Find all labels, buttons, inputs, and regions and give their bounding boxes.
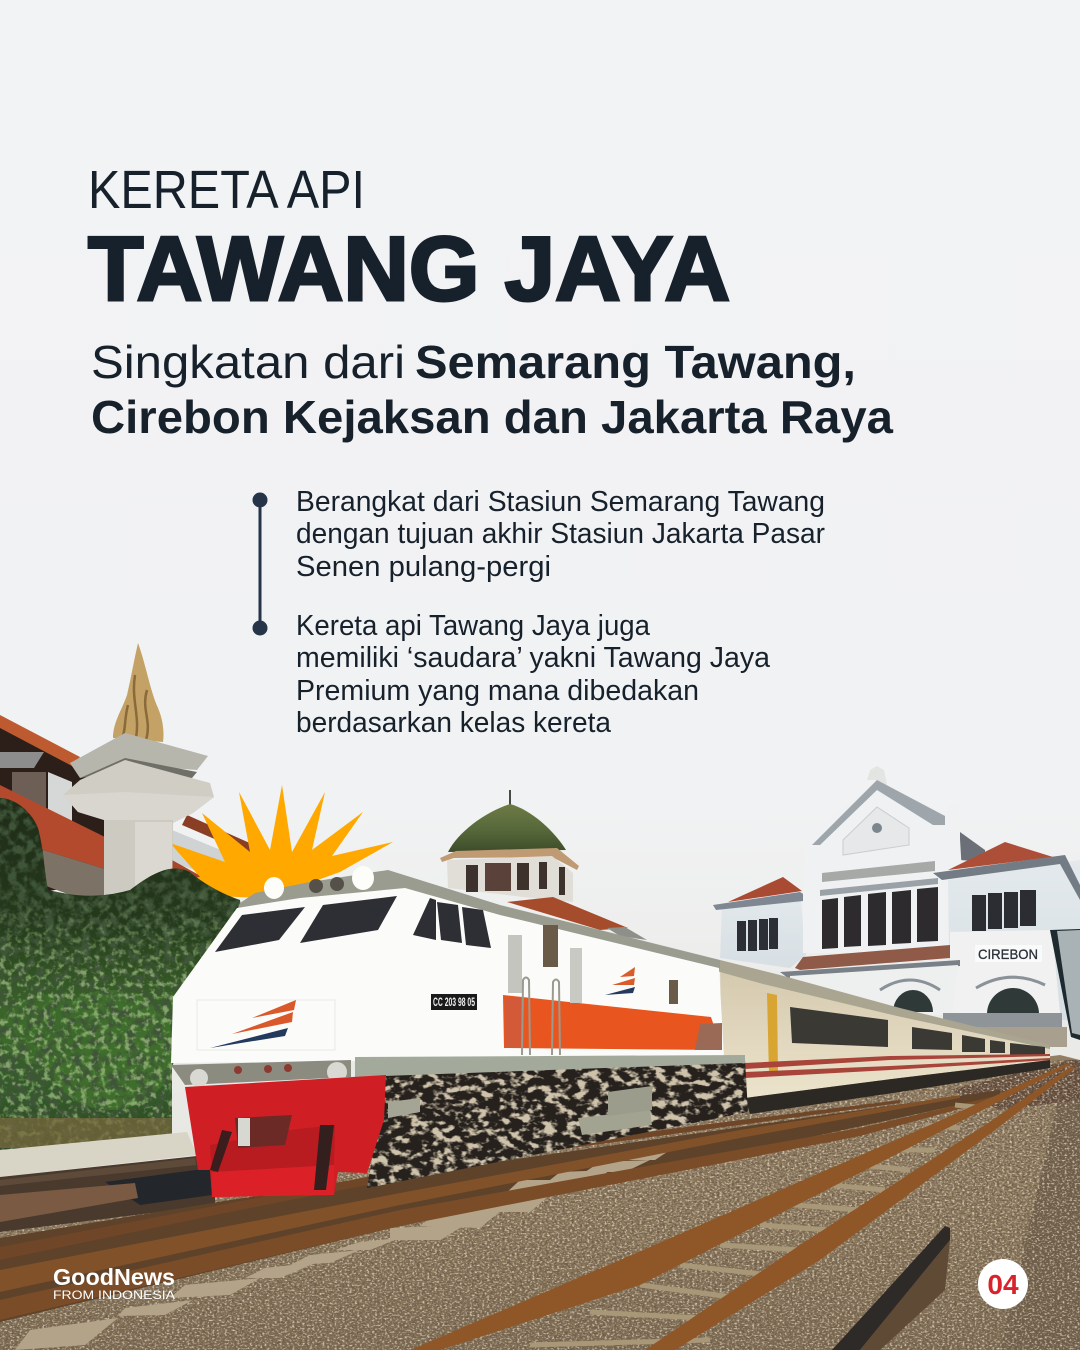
- timeline marker: [252, 492, 268, 636]
- inner gable: [843, 807, 909, 855]
- arched windows: [893, 990, 933, 1012]
- left tracks: [0, 1156, 215, 1232]
- coupler: [235, 1115, 292, 1148]
- carriage stripes: [745, 1054, 1050, 1069]
- front light bar: [171, 1060, 351, 1085]
- front logo: [210, 1000, 296, 1048]
- red pilot: [185, 1075, 386, 1197]
- text block: route: dengan tujuan akhir Stasiun Jakarta Pasar: [296, 518, 825, 550]
- carriage door: [767, 993, 778, 1075]
- text block: sister train: Kereta api Tawang Jaya juga: [296, 610, 651, 642]
- locomotive roof: [235, 870, 720, 972]
- tower roof: [507, 897, 628, 930]
- vents: [508, 935, 522, 993]
- tower room: [447, 856, 573, 902]
- ground: [0, 1055, 1080, 1350]
- right wing: [948, 860, 1080, 1020]
- dome finial: [509, 790, 511, 805]
- text block: sister train: [296, 610, 771, 739]
- monument lower cap: [63, 760, 214, 823]
- logo: GoodNews: FROM INDONESIA: [53, 1290, 175, 1302]
- subtitle: Semarang Tawang,: [415, 336, 856, 388]
- left wing roof: [728, 877, 802, 902]
- carriages: [720, 963, 1050, 1098]
- monument: [63, 643, 214, 910]
- monument flame: [113, 643, 163, 742]
- station main windows: [822, 887, 938, 949]
- carriage underframe: [745, 1060, 1050, 1114]
- icon: starburst: [150, 785, 393, 898]
- subtitle: [91, 336, 893, 443]
- main track rails: [0, 1095, 1000, 1320]
- billboard: [1050, 929, 1080, 1040]
- locomotive underframe: [367, 1060, 748, 1188]
- page number: [978, 1259, 1028, 1309]
- dome: [448, 804, 566, 852]
- title: [88, 160, 730, 320]
- handrails: [522, 978, 560, 1055]
- main track bed: [0, 1090, 1000, 1322]
- number plate: CC 203 98 05: [433, 995, 475, 1009]
- grey running band: [355, 1055, 745, 1077]
- logo: GoodNews: [53, 1264, 175, 1302]
- cornice: [440, 848, 579, 870]
- carriage windows: [790, 1007, 1045, 1056]
- title line: KERETA API: KERETA API: [88, 160, 365, 220]
- text block: route: Senen pulang-pergi: [296, 551, 551, 583]
- right wing roof back: [960, 832, 985, 862]
- main track sleepers: [15, 1150, 670, 1350]
- page number: 04: [987, 1269, 1019, 1300]
- lower facade: [790, 965, 958, 1015]
- logo: GoodNews: GoodNews: [53, 1264, 175, 1290]
- building behind monument: [0, 715, 270, 908]
- near track rails: [410, 1063, 1075, 1350]
- lower roof: [795, 945, 950, 970]
- near track sleepers: [530, 1105, 985, 1345]
- text block: route: Berangkat dari Stasiun Semarang Tawang: [296, 486, 825, 518]
- monument column: [104, 820, 173, 910]
- windshields: [215, 907, 305, 952]
- station sign: CIREBON: [978, 946, 1038, 962]
- headlamps: [264, 877, 284, 899]
- text block: sister train: Premium yang mana dibedakan: [296, 675, 699, 707]
- dome building: [440, 790, 647, 940]
- text block: sister train: memiliki ‘saudara’ yakni Tawang Jaya: [296, 642, 771, 674]
- main block: [803, 780, 962, 953]
- train: [171, 866, 1050, 1197]
- text block: sister train: berdasarkan kelas kereta: [296, 707, 612, 739]
- subtitle: Singkatan dari: [91, 336, 405, 388]
- text block: route: [296, 486, 825, 583]
- number plate: [431, 994, 477, 1010]
- subtitle: Cirebon Kejaksan dan Jakarta Raya: [91, 391, 893, 443]
- tip ornament: [867, 766, 887, 785]
- left wing wall: [720, 892, 806, 968]
- cab windows: [413, 898, 436, 940]
- locomotive body: [171, 888, 724, 1063]
- Cirebon station: [713, 766, 1080, 1047]
- vent row: [822, 861, 935, 882]
- platform wall: [0, 1132, 197, 1177]
- side logo: [605, 967, 635, 995]
- orange stripe: [503, 995, 722, 1050]
- trees: [0, 798, 250, 1150]
- front panel: [197, 1000, 335, 1050]
- title line: TAWANG JAYA: TAWANG JAYA: [88, 219, 730, 320]
- monument upper cap: [70, 733, 208, 778]
- gable line: [812, 780, 945, 845]
